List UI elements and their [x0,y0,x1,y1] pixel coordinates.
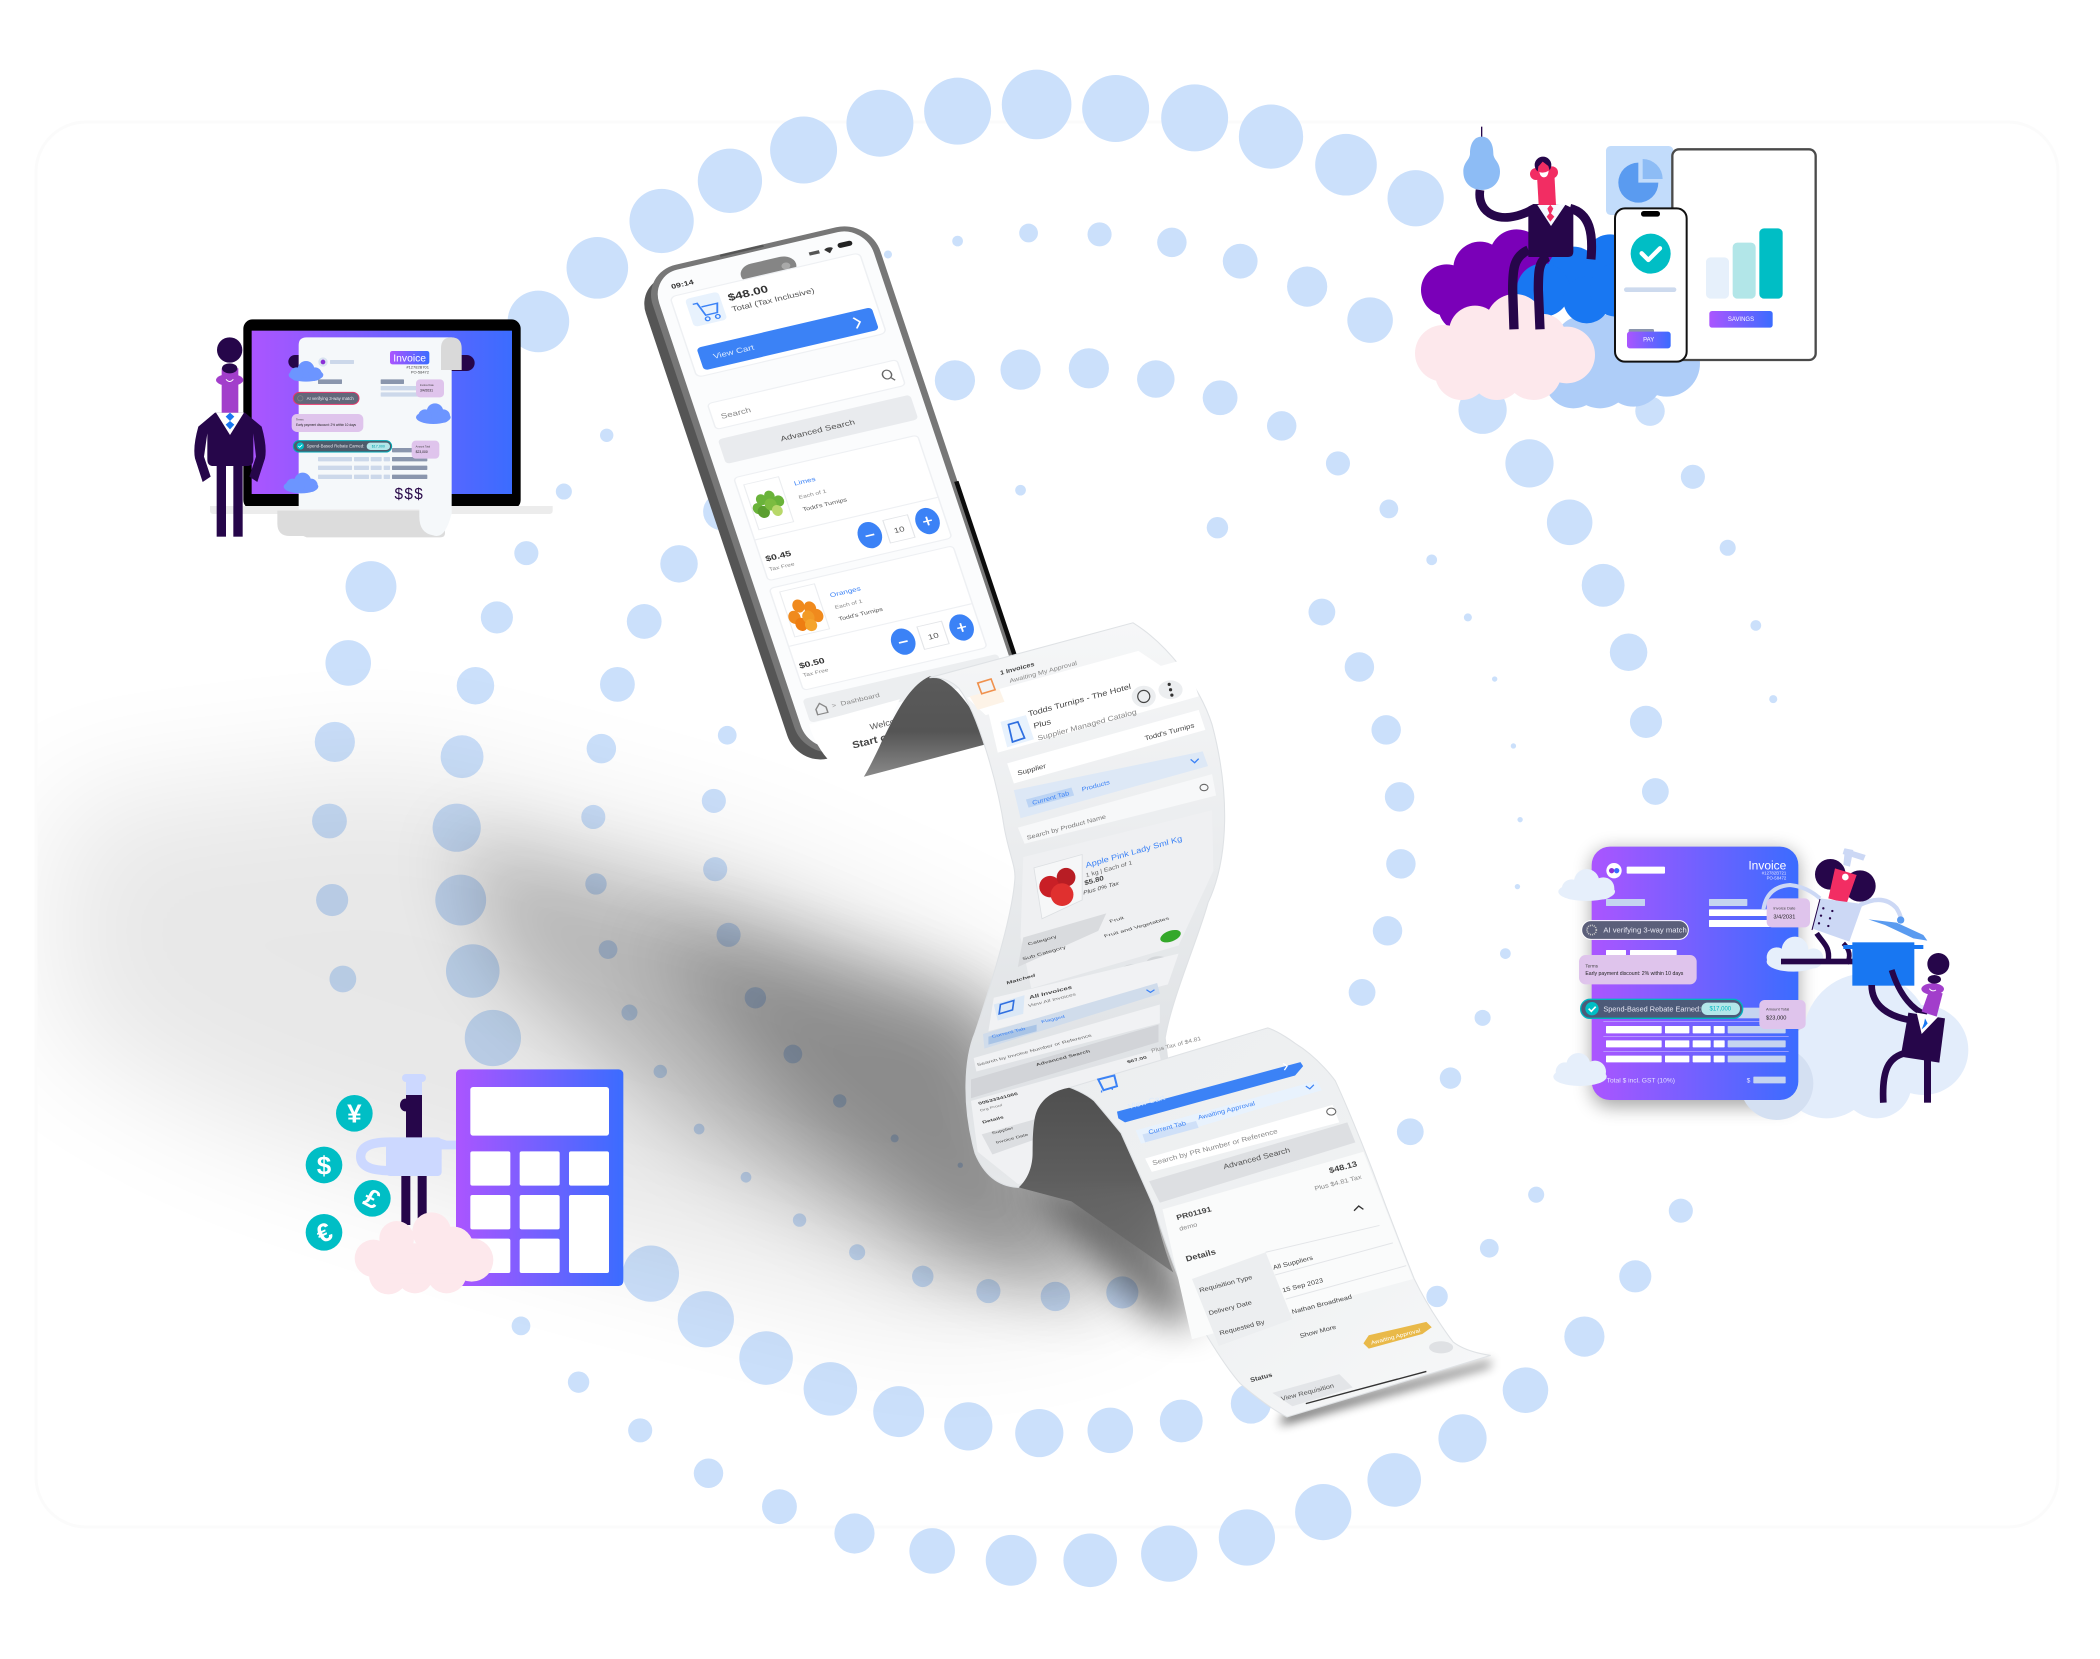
upper ribbon content: supplier catalog: Current Tab [1032,790,1070,807]
illustration: laptop with invoice and standing man [194,319,553,537]
search field [707,360,905,429]
product card: limes: Tax Free [769,562,796,573]
upper ribbon content: all invoices: All Invoices [1027,985,1074,1001]
man carrying the pot [1872,953,1949,1103]
lower ribbon content: requisition details [1098,1035,1453,1406]
cart summary card: $48.00 [726,283,770,304]
lower ribbon content: requisition details: Status [1250,1372,1273,1384]
upper ribbon content: apple product: Fruit and Vegetables [1103,917,1170,939]
figure pressing calculator [361,1074,456,1225]
currency coins: ¥ [347,1099,362,1129]
lower ribbon content: requisition details: Search by PR Number or Reference [1151,1127,1279,1167]
lower ribbon content: requisition details: demo [1179,1222,1199,1233]
receipt with invoice details: Terms [296,418,304,422]
purple cloud [1421,229,1563,332]
receipt with invoice details: Invoice [393,354,426,365]
product card: limes: $0.45 [764,549,792,563]
upper ribbon content: supplier catalog: Search by Product Name [1026,814,1107,842]
invoice card: Amount Total [1766,1007,1789,1012]
lower ribbon content: requisition details: Show More [1299,1324,1337,1340]
upper ribbon content: apple product: 1 kg | Each of 1 [1085,860,1133,879]
lower ribbon content: requisition details: Requisition Type [1199,1274,1253,1294]
cast shadow of the paper ribbon [54,763,1199,1326]
cart summary card: Total (Tax Inclusive) [730,286,816,313]
receipt with invoice details: Spend-Based Rebate Earned: [307,444,364,449]
upper ribbon content: all invoices: $67.00 [1126,1056,1148,1065]
upper ribbon content: apple product: Matched [1006,974,1037,986]
upper ribbon content: supplier catalog: Awaiting My Approval [1009,660,1078,685]
first curl: white paper leaving the phone: Start ord [851,729,899,751]
upper ribbon content: supplier catalog: Todd's Turnips [1144,721,1195,742]
currency coins [306,1095,391,1251]
product card: limes: Limes [793,475,817,487]
lower ribbon content: requisition details: View Requisition [1280,1383,1335,1403]
seated man holding pear [1463,127,1592,329]
lower ribbon content: requisition details: PR01191 [1175,1205,1213,1222]
laptop [210,319,553,514]
cart summary card: View Cart [712,343,756,360]
upper ribbon content: apple product: Sub Category [1022,946,1067,962]
shadow under lower ribbon tip [1279,1361,1492,1425]
blue cooking pot with lid [1843,916,1927,986]
upper ribbon content: apple product: Apple Pink Lady Sml Kg [1085,834,1183,870]
receipt with invoice details: $23,000 [416,450,428,454]
invoice card: Total $ incl. GST (10%) [1607,1078,1675,1085]
receipt with invoice details: Invoice Date [420,384,434,387]
receipt with invoice details: 3/4/2031 [420,389,433,393]
invoice card: Spend-Based Rebate Earned: [1603,1004,1701,1013]
lower ribbon content: requisition details: All Suppliers [1272,1255,1315,1271]
invoice card: $ [1747,1078,1751,1085]
upper ribbon content: apple product: $5.80 [1084,874,1104,887]
upper ribbon content: apple product: Fruit [1109,916,1126,924]
lower ribbon content: requisition details: Advanced Search [1222,1146,1291,1171]
lower ribbon content: requisition details: 15 Sep 2023 [1282,1278,1324,1294]
pale clouds on card edges [1553,869,1823,1086]
pink cloud [355,1212,493,1294]
product card: oranges: 10 [927,631,940,641]
light blue cloud [1545,313,1700,408]
advanced search bar [718,395,918,464]
lower ribbon content: requisition details: Delivery Date [1208,1300,1253,1317]
invoice card: #12782B721 [1762,871,1787,876]
currency coins: € [311,1216,337,1249]
upper ribbon content: all invoices: Supplier [991,1126,1015,1136]
receipt with invoice details: $$$ [395,486,424,503]
upper ribbon content: all invoices: Advanced Search [1035,1049,1092,1067]
invoice card: AI verifying 3-way match [1603,926,1687,935]
status bar and notch [670,240,858,302]
upper ribbon content: all invoices: Flagged [1041,1015,1066,1025]
product card: limes: Each of 1 [798,489,827,501]
currency coins: £ [359,1182,386,1216]
breadcrumb bar: > [831,703,838,709]
first curl: white paper leaving the phone: Welcome [869,713,908,732]
chef with shaker [1763,848,1901,964]
invoice card: $17,000 [1710,1007,1732,1013]
first curl: white paper leaving the phone [809,676,990,777]
upper ribbon content: supplier catalog: 1 Invoices [1000,661,1035,677]
product card: oranges: Tax Free [802,668,830,679]
receipt with invoice details: AI verifying 3-way match [307,396,354,401]
blue cloud [1517,234,1643,323]
upper ribbon content: supplier catalog [967,651,1216,844]
breadcrumb bar: Dashboard [839,691,881,707]
upper ribbon content: all invoices: 00533341066 [978,1092,1019,1106]
upper ribbon content: supplier catalog: Plus [1033,717,1052,730]
illustration: man on clouds with phone and tablet savings [1415,127,1816,408]
smartphone mockup with cart screen [633,220,1033,766]
invoice card: $23,000 [1766,1016,1786,1022]
upper ribbon sheet [929,623,1225,1187]
phone with pay button: PAY [1643,338,1654,344]
upper ribbon content: supplier catalog: Todds Turnips - The Hotel [1027,682,1132,718]
product card: limes: Todd's Turnips [802,497,848,513]
cart summary card [670,253,886,377]
product card: oranges: Todd's Turnips [838,606,884,622]
product card: oranges: Each of 1 [834,599,863,611]
receipt with invoice details: PO-58472 [411,370,430,375]
upper ribbon content: supplier catalog: Supplier Managed Catalog [1037,708,1137,742]
chef with shaker: Invoice Date [1773,905,1796,910]
invoice card [1579,847,1806,1100]
calculator [456,1069,623,1286]
invoice card: Terms [1585,963,1599,968]
upper ribbon content: all invoices: Details [982,1116,1005,1125]
advanced search bar: Advanced Search [779,418,856,443]
tablet with savings chart [1606,146,1816,360]
invoice card: PO-58472 [1767,876,1787,881]
upper ribbon content: all invoices: Invoice Date [995,1133,1030,1145]
upper ribbon content: apple product [1006,810,1213,988]
product card: limes [734,435,952,581]
upper ribbon content: all invoices: Search by Invoice Number or Reference [976,1034,1093,1067]
receipt with invoice details: #12782B701 [406,365,430,370]
second hump underside [1019,1088,1173,1272]
currency coins: $ [317,1150,332,1180]
lower ribbon content: requisition details: Requested By [1219,1319,1266,1337]
breadcrumb bar [802,654,1006,723]
product card: oranges: $0.50 [798,656,826,670]
lower ribbon content: requisition details: Awaiting Approval [1197,1101,1256,1121]
upper ribbon content: supplier catalog: Supplier [1017,761,1047,777]
lower ribbon content: requisition details: View Cart [1127,1093,1167,1111]
invoice card: Invoice [1748,858,1787,872]
standing man [194,337,266,537]
tablet with savings chart: SAVINGS [1728,317,1754,323]
upper ribbon content: apple product: Category [1027,935,1058,947]
pale cloud behind figures [1740,973,1968,1120]
lower ribbon content: requisition details: Details [1184,1247,1217,1263]
lower ribbon content: requisition details: Plus Tax of $4.81 [1151,1035,1202,1054]
chef with shaker: 3/4/2031 [1773,915,1795,921]
receipt with invoice details: $17,000 [372,445,385,449]
upper ribbon content: apple product: Plus 0% Tax [1083,880,1120,896]
spiral of blue dots [312,70,1777,1587]
receipt with invoice details: Amount Total [416,445,431,448]
lower ribbon content: requisition details: Plus $4.81 Tax [1314,1174,1363,1192]
product card: oranges [769,546,987,690]
upper ribbon content: all invoices [971,954,1179,1184]
lower ribbon content: requisition details: Current Tab [1148,1120,1187,1136]
product card: limes: 10 [893,524,906,535]
lower ribbon content: requisition details: $48.13 [1328,1159,1358,1175]
search field: Search [720,405,752,421]
upper ribbon content: supplier catalog: Products [1081,779,1111,793]
upper ribbon content: all invoices: Org Proof [979,1103,1004,1112]
upper ribbon content: all invoices: Current Tab [991,1027,1027,1039]
lower ribbon content: requisition details: Nathan Broadhead [1291,1294,1353,1316]
blue clouds [284,361,451,493]
lower ribbon content: requisition details: Awaiting Approval [1370,1328,1421,1346]
card drop shadow [1592,850,1798,1107]
product card: oranges: Oranges [829,584,862,599]
paper ribbon flowing from the phone [809,623,1492,1425]
lower ribbon sheet [1070,1028,1491,1417]
invoice card: Early payment discount: 2% within 10 days [1585,971,1684,977]
phone with pay button [1615,208,1687,362]
phone body [633,220,1033,766]
illustration: calculator with currency coins [306,1069,623,1294]
status bar and notch: 09:14 [670,278,695,291]
receipt with invoice details: Early payment discount: 2% within 10 days [296,423,356,427]
receipt with invoice details [277,337,475,537]
upper ribbon content: all invoices: View All Invoices [1027,992,1077,1008]
pink cloud [1415,294,1595,400]
illustration: invoice card with chef and pot [1553,847,1968,1120]
